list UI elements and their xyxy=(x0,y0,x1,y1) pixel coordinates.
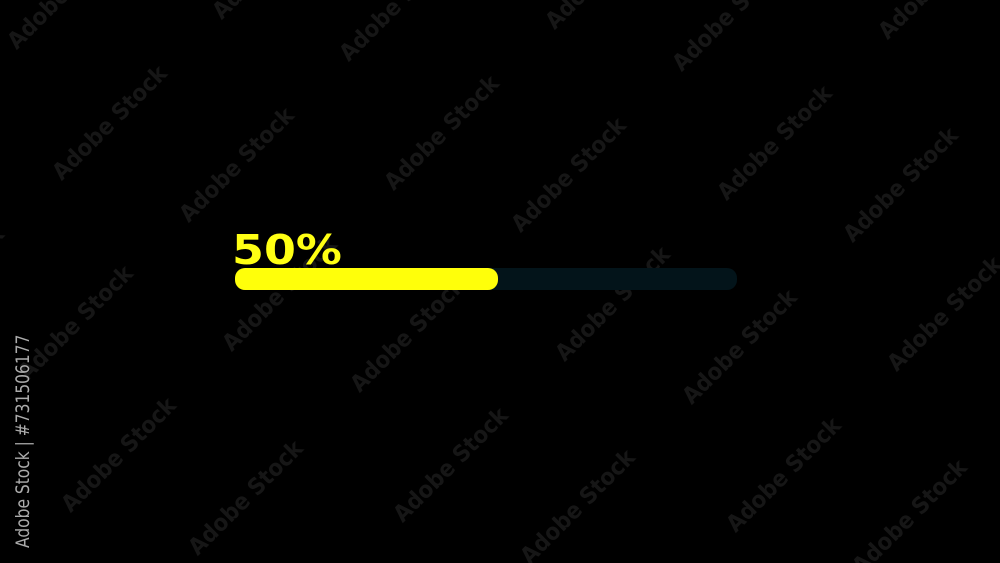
watermarks: Adobe Stock xyxy=(183,434,310,561)
watermarks: Adobe Stock xyxy=(217,230,344,357)
watermarks: Adobe Stock xyxy=(47,59,174,186)
watermarks: Adobe Stock xyxy=(56,391,183,518)
watermarks: Adobe Stock xyxy=(379,69,506,196)
watermarks: Adobe Stock xyxy=(677,283,804,410)
watermarks: Adobe Stock xyxy=(388,401,515,528)
progress bar fill xyxy=(235,268,498,290)
watermarks: Adobe Stock xyxy=(13,259,140,386)
percentage label: 50% xyxy=(232,227,342,274)
watermarks: Adobe Stock xyxy=(550,240,677,367)
watermarks: Adobe Stock xyxy=(174,101,301,228)
progress bar track xyxy=(235,268,737,290)
watermarks: Adobe Stock xyxy=(345,271,472,398)
watermarks: Adobe Stock xyxy=(506,111,633,238)
stock id side text: Adobe Stock | #731506177 xyxy=(13,335,34,548)
watermarks: Adobe Stock xyxy=(838,121,965,248)
watermarks: Adobe Stock xyxy=(721,411,848,538)
watermarks: Adobe Stock xyxy=(712,79,839,206)
